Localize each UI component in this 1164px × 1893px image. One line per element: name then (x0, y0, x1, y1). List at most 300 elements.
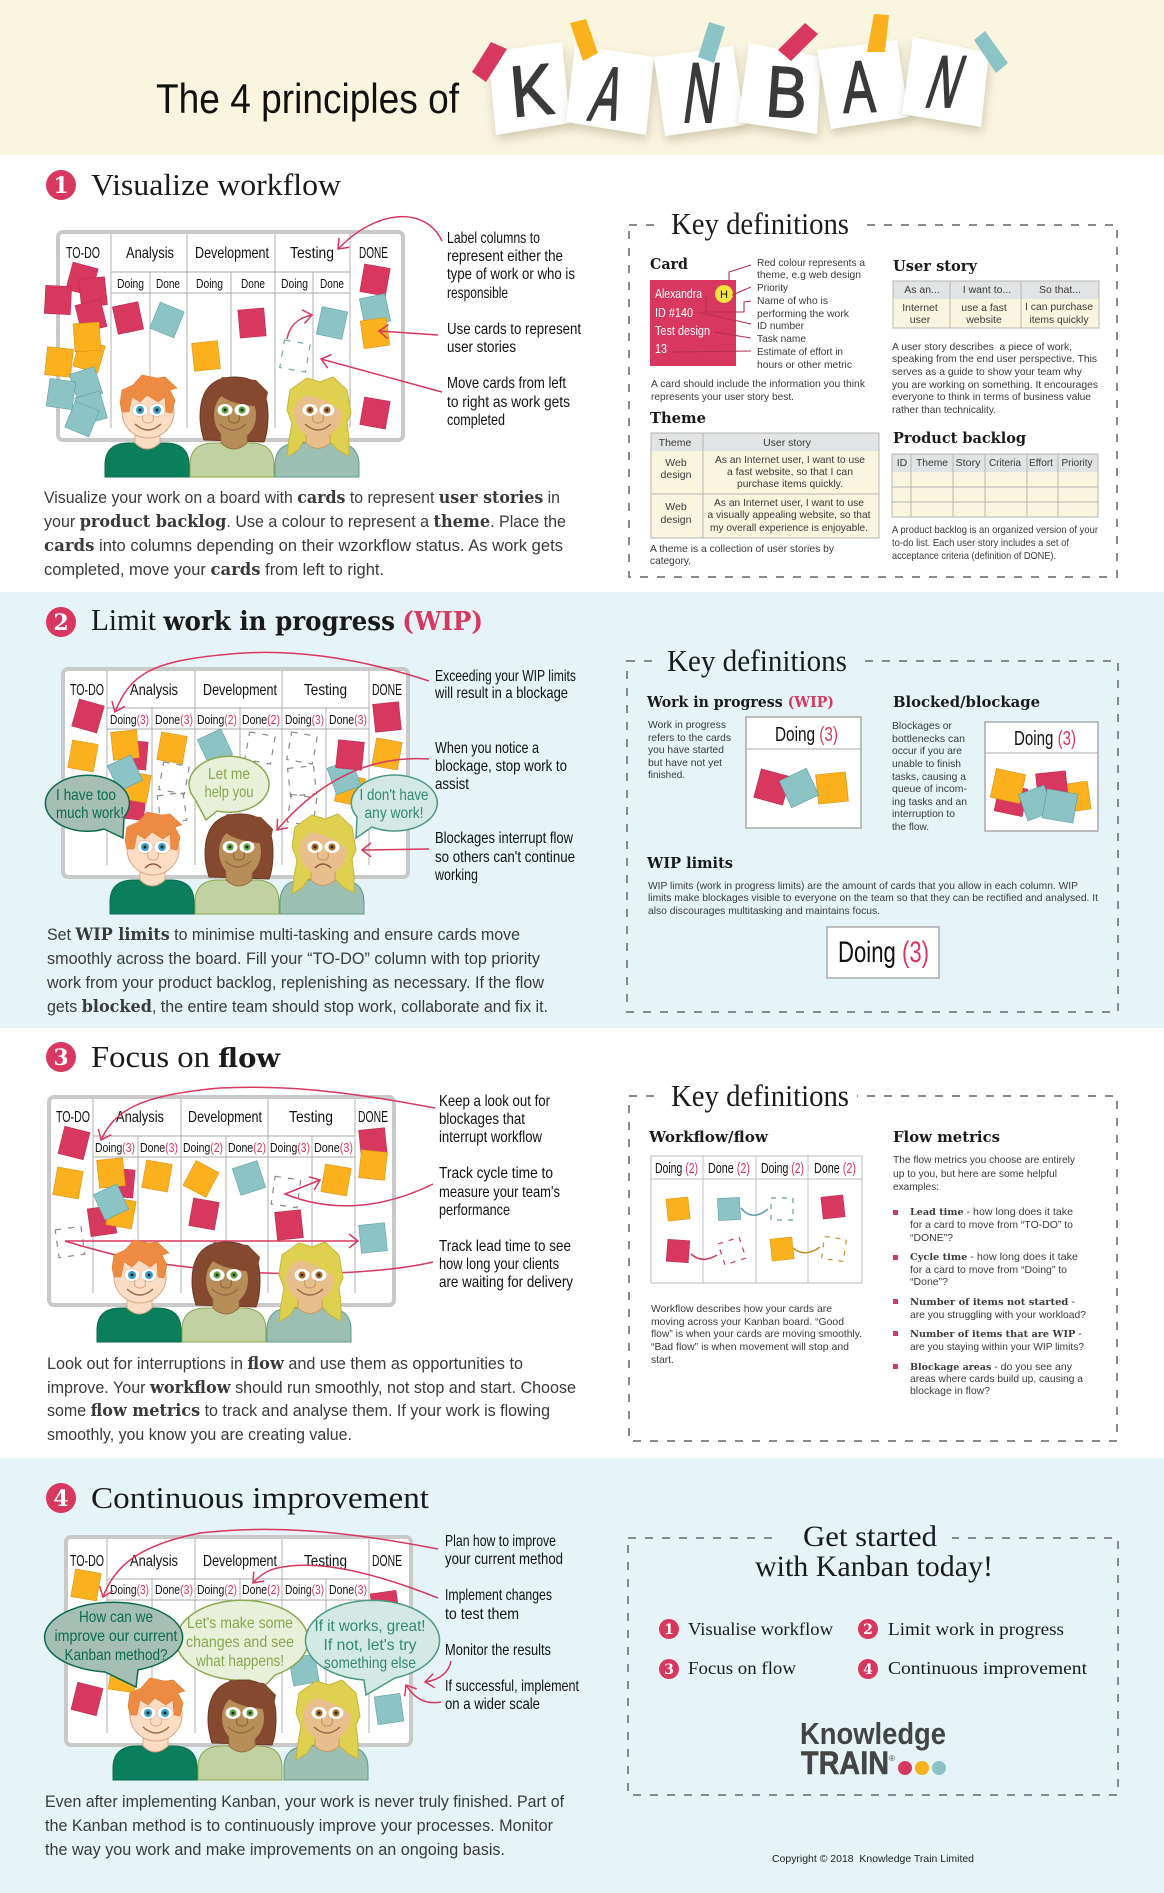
annotations 1: Use cards to represent (447, 321, 581, 338)
body text 3: smoothly, you know you are creating value. (47, 1425, 352, 1444)
bullet list: are you staying within your WIP limits? (910, 1341, 1084, 1353)
definition: product backlog: Product backlog (893, 429, 1026, 447)
body text 1: your product backlog. Use a colour to represent a theme. Place the (44, 512, 566, 532)
annotations 2: assist (435, 776, 469, 793)
example card: 13 (655, 341, 667, 356)
body text 1: cards into columns depending on their wzorkflow status. As work gets (44, 536, 563, 556)
title cards with tape and KANBAN letters: A (582, 53, 634, 137)
speech bubble: If it works, great: If not, let's try (324, 1637, 416, 1654)
title: The 4 principles of Kanban (156, 14, 1008, 140)
definition: product backlog (892, 429, 1098, 562)
title cards with tape and KANBAN letters: N (917, 41, 975, 123)
definition: blocked: queue of incom- (892, 783, 967, 795)
definition: workflow: start. (651, 1354, 674, 1366)
heading 1: Visualize workflow (91, 167, 342, 202)
example card (650, 280, 736, 366)
kanban board 4: Analysis (130, 1553, 178, 1570)
kanban board 4: Development (203, 1553, 277, 1570)
kanban board 1 (44, 232, 403, 440)
bullet list (893, 1206, 1086, 1397)
definition: work in progress (646, 693, 861, 828)
product backlog table: ID (897, 457, 908, 469)
definition: WIP limits: WIP limits (work in progress limits) are the amount of cards that you allow in each column. WIP (648, 880, 1078, 892)
section 4: Continuous improvement (45, 1480, 579, 1859)
definition: card: Priority (757, 282, 789, 294)
speech bubble: Let me help you: Let me (208, 766, 250, 783)
definition: flow metrics: up to you, but here are some helpful (893, 1168, 1057, 1180)
list of four principles (659, 1619, 1087, 1679)
list of four principles: 3 (664, 1662, 674, 1678)
heading 2: Limit work in progress (WIP) (91, 602, 483, 637)
definition: card: performing the work (757, 308, 850, 320)
blocked column illustration (985, 722, 1098, 831)
kanban board 3: Testing (289, 1109, 333, 1126)
body text 1: completed, move your cards from left to right. (44, 560, 384, 580)
example card: Alexandra (655, 286, 703, 301)
kanban board 1: Done (320, 276, 344, 291)
body text 4: the Kanban method is to continuously improve your processes. Monitor (45, 1816, 553, 1835)
product backlog table (892, 454, 1098, 517)
annotations 1: represent either the (447, 248, 563, 265)
bullet list: Number of items that are WIP - (910, 1328, 1083, 1340)
copyright: Copyright © 2018 Knowledge Train Limited (772, 1853, 974, 1865)
arrows 2 (115, 652, 429, 850)
body text 2: Set WIP limits to minimise multi-tasking and ensure cards move (47, 925, 520, 945)
example card: Test design (655, 323, 710, 338)
definition: user story: rather than technicality. (892, 404, 996, 416)
kanban board 1: TO-DO (66, 245, 100, 262)
number badge 4: 4 (53, 1486, 69, 1512)
logo: Knowledge Train (800, 1716, 946, 1781)
team characters 2 (110, 812, 364, 914)
kanban board 2: Doing(3) (285, 712, 324, 727)
theme table: User story (763, 437, 812, 449)
annotations 1: user stories (447, 339, 516, 356)
annotations 4: on a wider scale (445, 1696, 540, 1713)
user story table: items quickly (1030, 314, 1089, 326)
kanban board 2: DONE (372, 682, 402, 699)
annotations 3: Track cycle time to (439, 1165, 553, 1182)
speech bubble: I don't have any work: any work! (364, 805, 424, 822)
annotations 3: blockages that (439, 1111, 525, 1128)
annotations 2: When you notice a (435, 740, 539, 757)
bullet list: are you struggling with your workload? (910, 1309, 1086, 1321)
definition: product backlog: A product backlog is an organized version of your (892, 524, 1098, 536)
bullet list: Cycle time - how long does it take (910, 1251, 1078, 1263)
title cards with tape and KANBAN letters: N (679, 45, 726, 140)
kanban board 3: Development (188, 1109, 262, 1126)
section 1: Visualize workflow (44, 167, 581, 580)
definition: flow metrics: The flow metrics you choose are entirely (893, 1154, 1076, 1166)
definition: WIP limits: also discourages multitasking and maintains focus. (648, 905, 880, 917)
list of four principles: Continuous improvement (888, 1658, 1087, 1678)
definition: card: Red colour represents a (757, 257, 865, 269)
definition: blocked: unable to finish (892, 758, 961, 770)
definition: card: theme, e.g web design (757, 269, 861, 281)
annotations 2: blockage, stop work to (435, 758, 567, 775)
section 2: Limit work in progress (45, 602, 576, 1017)
speech bubble: If it works, great (305, 1600, 439, 1695)
definition: user story: you are working on something. It encourages (892, 379, 1098, 391)
body text 2: smoothly across the board. Fill your “TO-DO” column with top priority (47, 949, 540, 968)
definition: card: A card should include the information you think (651, 378, 866, 390)
definition: workflow: flow” is when your cards are moving smoothly. (651, 1328, 862, 1340)
user story table: user (910, 314, 931, 326)
definition: flow metrics: examples: (893, 1181, 939, 1193)
speech bubble: I have too much work (45, 775, 129, 838)
panel: key definitions 3 (629, 1078, 1117, 1441)
theme table: As an Internet user, I want to use (714, 497, 864, 509)
definition: card: represents your user story best. (651, 391, 794, 403)
definition: work in progress: finished. (648, 769, 685, 781)
definition: blocked: the flow. (892, 821, 929, 833)
panel title: Key definitions (671, 1078, 849, 1113)
kanban board 3: Done(3) (314, 1140, 353, 1155)
annotations 4: Plan how to improve (445, 1533, 556, 1550)
theme table: a visually appealing website, so that (708, 509, 871, 521)
logo: Knowledge Train: TRAIN (801, 1745, 889, 1781)
kanban board 1: Doing (196, 276, 223, 291)
annotations 4: your current method (445, 1551, 563, 1568)
doing column illustration (746, 717, 861, 828)
speech bubble: How can we improve (45, 1602, 183, 1687)
body text 1 (44, 488, 566, 580)
number badge 2: 2 (53, 610, 69, 636)
speech bubble: I have too much work: much work! (56, 805, 124, 822)
annotations 2 (434, 668, 576, 884)
kanban board 4: Doing(2) (197, 1582, 237, 1597)
kanban board 1: Analysis (126, 245, 174, 262)
list of four principles: 2 (863, 1622, 873, 1638)
definition: WIP limits: limits make blockages visible to everyone on the team so that they can be rectified and analysed. It (648, 892, 1098, 904)
product backlog table: Theme (916, 457, 948, 469)
panel title: Key definitions (667, 643, 847, 678)
definition: work in progress: refers to the cards (648, 732, 731, 744)
kanban board 1: DONE (359, 245, 388, 262)
theme table: Web (665, 457, 687, 469)
annotations 1: Label columns to (447, 230, 540, 247)
bullet list: for a card to move from “TO-DO” to (910, 1219, 1073, 1231)
theme table (651, 433, 879, 538)
example card: H (720, 289, 728, 301)
definition: blocked: interruption to (892, 808, 955, 820)
kanban board 3: Done(2) (228, 1140, 266, 1155)
annotations 4: Implement changes (445, 1587, 552, 1604)
definition: workflow: Workflow/flow (648, 1128, 769, 1146)
kanban board 3: Doing(3) (95, 1140, 135, 1155)
kanban board 4: Done(2) (242, 1582, 280, 1597)
bullet list: Number of items not started - (910, 1296, 1076, 1308)
blocked column illustration: Doing (3) (1014, 728, 1076, 750)
kanban board 3: Analysis (116, 1109, 164, 1126)
workflow diagram: Done (2) (708, 1160, 750, 1177)
kanban board 4: Done(3) (329, 1582, 367, 1597)
team characters 3 (97, 1240, 351, 1342)
team characters 4 (113, 1678, 368, 1780)
theme table: design (661, 469, 692, 481)
workflow diagram: Doing (2) (655, 1160, 698, 1177)
list of four principles: Limit work in progress (888, 1619, 1064, 1639)
bullet list: “Done”? (910, 1276, 948, 1288)
definition: work in progress: you have started (648, 744, 724, 756)
body text 3: some flow metrics to track and analyse them. If your work is flowing (47, 1401, 550, 1421)
list of four principles: Visualise workflow (688, 1619, 833, 1639)
title cards with tape and KANBAN letters: A (841, 47, 877, 129)
kanban board 3: TO-DO (56, 1109, 90, 1126)
bullet list: blockage in flow? (910, 1385, 990, 1397)
annotations 3 (439, 1093, 573, 1291)
body text 3: improve. Your workflow should run smoothly, not stop and start. Choose (47, 1378, 576, 1398)
kanban board 4: DONE (372, 1553, 402, 1570)
speech bubble: Let's make some changes: changes and see (186, 1634, 294, 1651)
speech bubble: If it works, great: If it works, great! (314, 1618, 426, 1635)
list of four principles: Focus on flow (688, 1658, 796, 1678)
user story table: Internet (902, 302, 938, 314)
user story table: website (965, 314, 1002, 326)
number badge 1 (46, 170, 76, 200)
theme table: design (661, 514, 692, 526)
speech bubble: Let's make some changes (176, 1600, 308, 1692)
definition: blocked: Blockages or (892, 720, 952, 732)
bullet list: for a card to move from “Doing” to (910, 1264, 1067, 1276)
definition: card: Estimate of effort in (757, 346, 843, 358)
body text 2: work from your product backlog, replenishing as necessary. If the flow (46, 973, 545, 992)
definition: card: hours or other metric (757, 359, 852, 371)
kanban board 2: Development (203, 682, 277, 699)
annotations 1: type of work or who is (447, 266, 575, 283)
kanban board 2: Analysis (130, 682, 178, 699)
definition: user story: User story (893, 257, 978, 275)
annotations 3: performance (439, 1202, 510, 1219)
speech bubble: How can we improve: How can we (79, 1609, 153, 1626)
body text 3 (47, 1354, 576, 1444)
title text: The 4 principles of (156, 75, 459, 122)
bullet list: areas where cards build up, causing a (910, 1373, 1083, 1385)
definition: work in progress: Work in progress (648, 719, 726, 731)
definition: work in progress: but have not yet (648, 757, 722, 769)
definition: blocked: ing tasks and an (892, 796, 967, 808)
definition: product backlog: acceptance criteria (definition of DONE). (892, 550, 1056, 562)
definition: work in progress: Work in progress (WIP) (646, 693, 834, 711)
definition: workflow: “Bad flow” is when movement will stop and (651, 1341, 849, 1353)
heading 3: Focus on flow (91, 1039, 281, 1074)
annotations 3: how long your clients (439, 1256, 559, 1273)
user story table: As an... (904, 284, 940, 296)
workflow diagram (651, 1156, 862, 1283)
definition: blocked (892, 693, 1098, 833)
definition: theme (650, 409, 879, 567)
kanban board 4: Done(3) (155, 1582, 193, 1597)
definition: user story: serves as a guide to show your team why (892, 366, 1083, 378)
definition: user story: A user story describes a piece of work, (892, 341, 1072, 353)
speech bubble: Let's make some changes: what happens! (195, 1653, 284, 1670)
WIP limit label: Doing (3) (838, 936, 929, 969)
heading 4: Continuous improvement (91, 1480, 429, 1515)
definition: flow metrics: Flow metrics (893, 1128, 1000, 1146)
kanban board 2: TO-DO (70, 682, 104, 699)
speech bubble: I don't have any work: I don't have (360, 787, 429, 804)
theme table: As an Internet user, I want to use (715, 454, 865, 466)
kanban board 1: Doing (117, 276, 144, 291)
speech bubble: How can we improve: improve our current (54, 1628, 178, 1645)
annotations 2: Blockages interrupt flow (435, 830, 573, 847)
arrows 3 (65, 1087, 435, 1274)
annotations 2: so others can't continue (435, 849, 575, 866)
definition: card (650, 255, 866, 403)
kanban board 3 (49, 1097, 394, 1305)
kanban board 1: Done (156, 276, 180, 291)
definition: theme: A theme is a collection of user stories by (650, 543, 835, 555)
annotations 4: Monitor the results (445, 1642, 551, 1659)
speech bubble: I don't have any work (351, 775, 437, 838)
body text 1: Visualize your work on a board with cards to represent user stories in (44, 488, 560, 508)
arrows 1 (287, 217, 442, 392)
definition: blocked: tasks, causing a (892, 771, 966, 783)
theme table: Web (665, 501, 687, 513)
annotations 2: working (434, 867, 478, 884)
user story table: use a fast (961, 302, 1007, 314)
kanban board 2: Done(3) (155, 712, 193, 727)
workflow diagram: Doing (2) (761, 1160, 804, 1177)
arrows 4 (103, 1529, 451, 1703)
annotations 3: measure your team's (439, 1184, 560, 1201)
annotations 1: Move cards from left (447, 375, 566, 392)
annotations 3: Track lead time to see (439, 1238, 571, 1255)
example card: ID #140 (655, 305, 693, 320)
kanban board 3: Doing(3) (270, 1140, 310, 1155)
definition: blocked: Blocked/blockage (893, 693, 1040, 711)
theme table: purchase items quickly. (737, 478, 843, 490)
kanban board 1: Done (241, 276, 265, 291)
speech bubble: How can we improve: Kanban method? (64, 1647, 168, 1664)
user story table: I want to... (963, 284, 1011, 296)
kanban board 2: Done(3) (329, 712, 367, 727)
product backlog table: Priority (1062, 457, 1093, 469)
panel: get started (628, 1520, 1118, 1795)
annotations 3: interrupt workflow (439, 1129, 542, 1146)
definition: card: ID number (757, 320, 804, 332)
annotations 3: Keep a look out for (439, 1093, 551, 1110)
team characters 1 (105, 375, 359, 477)
annotations 4 (445, 1533, 579, 1713)
annotations 1: completed (447, 412, 505, 429)
definition: theme: Theme (650, 409, 706, 427)
body text 4 (45, 1792, 564, 1859)
speech bubble: If it works, great: something else (324, 1655, 416, 1672)
definition: user story: everyone to think in terms of business value (892, 391, 1091, 403)
body text 4: Even after implementing Kanban, your work is never truly finished. Part of (45, 1792, 564, 1811)
annotations 1 (447, 230, 581, 429)
product backlog table: Story (956, 457, 981, 469)
definition: card: Card (650, 255, 688, 273)
speech bubble: Let's make some changes: Let's make some (187, 1615, 293, 1632)
bullet list: Blockage areas - do you see any (910, 1361, 1073, 1373)
kanban board 4: TO-DO (70, 1553, 104, 1570)
kanban board 2: Done(2) (242, 712, 280, 727)
bullet list: Lead time - how long does it take (910, 1206, 1073, 1218)
kanban board 2: Doing(2) (197, 712, 237, 727)
body text 4: the way you work and make improvements on an ongoing basis. (45, 1840, 505, 1859)
section 3: Focus on flow (46, 1039, 576, 1444)
definition: user story (892, 257, 1099, 416)
definition: blocked: bottlenecks can (892, 733, 965, 745)
user story table: I can purchase (1025, 301, 1093, 313)
annotations 4: to test them (445, 1606, 519, 1623)
user story table: So that... (1039, 284, 1081, 296)
definition: workflow: Workflow describes how your cards are (651, 1303, 832, 1315)
panel: key definitions 2 (627, 643, 1118, 1012)
definition: WIP limits (646, 854, 1098, 978)
kanban board 2: Testing (304, 682, 347, 699)
definition: blocked: occur if you are (892, 745, 962, 757)
annotations 2: Exceeding your WIP limits (435, 668, 576, 685)
workflow diagram: Done (2) (814, 1160, 856, 1177)
body text 2: gets blocked, the entire team should stop work, collaborate and fix it. (47, 997, 548, 1017)
kanban board 4: Doing(3) (285, 1582, 324, 1597)
annotations 4: If successful, implement (445, 1678, 579, 1695)
panel title: Key definitions (671, 206, 849, 241)
list of four principles: 1 (664, 1622, 674, 1638)
panel heading (755, 1520, 993, 1583)
definition: theme: category. (650, 555, 691, 567)
logo: Knowledge Train: ® (889, 1754, 895, 1763)
number badge 4 (46, 1483, 76, 1513)
kanban board 4: Doing(3) (110, 1582, 149, 1597)
kanban board 3: DONE (358, 1109, 388, 1126)
number badge 3 (46, 1042, 76, 1072)
logo: Knowledge Train: Knowledge (800, 1716, 946, 1751)
WIP limit label (827, 927, 939, 978)
body text 3: Look out for interruptions in flow and use them as opportunities to (47, 1354, 523, 1374)
kanban board 1: Doing (281, 276, 308, 291)
definition: flow metrics (893, 1128, 1086, 1397)
annotations 2: will result in a blockage (434, 685, 568, 702)
definition: workflow (648, 1128, 862, 1366)
list of four principles: 4 (863, 1662, 873, 1678)
definition: user story: speaking from the end user perspective. This (892, 353, 1097, 365)
product backlog table: Criteria (989, 457, 1021, 469)
speech bubble: Let me help you: help you (204, 784, 254, 801)
kanban board 3: Done(3) (140, 1140, 178, 1155)
annotations 1: responsible (447, 285, 508, 302)
annotations 3: are waiting for delivery (439, 1274, 573, 1291)
speech bubble: I have too much work: I have too (56, 787, 116, 804)
panel heading: Get started (803, 1520, 937, 1553)
kanban board 3: Doing(2) (183, 1140, 223, 1155)
annotations 1: to right as work gets (447, 394, 570, 411)
theme table: a fast website, so that I can (727, 466, 853, 478)
title cards with tape and KANBAN letters: B (764, 52, 810, 135)
kanban board 4: Testing (304, 1553, 347, 1570)
product backlog table: Effort (1029, 457, 1053, 469)
theme table: Theme (659, 437, 691, 449)
kanban board 1: Development (195, 245, 269, 262)
doing column illustration: Doing (3) (775, 724, 838, 746)
panel: key definitions 1 (629, 206, 1117, 577)
kanban board 2: Doing(3) (110, 712, 149, 727)
kanban board 4 (66, 1537, 411, 1745)
kanban board 2 (63, 669, 408, 877)
definition: product backlog: to-do list. Each user story includes a set of (892, 537, 1069, 549)
number badge 2 (46, 607, 76, 637)
theme table: my overall experience is enjoyable. (710, 522, 868, 534)
title cards with tape and KANBAN letters: K (507, 48, 557, 133)
bullet list: “DONE”? (910, 1232, 953, 1244)
body text 2 (46, 925, 548, 1017)
number badge 3: 3 (53, 1045, 69, 1071)
definition: card: Name of who is (757, 295, 828, 307)
number badge 1: 1 (53, 173, 69, 199)
